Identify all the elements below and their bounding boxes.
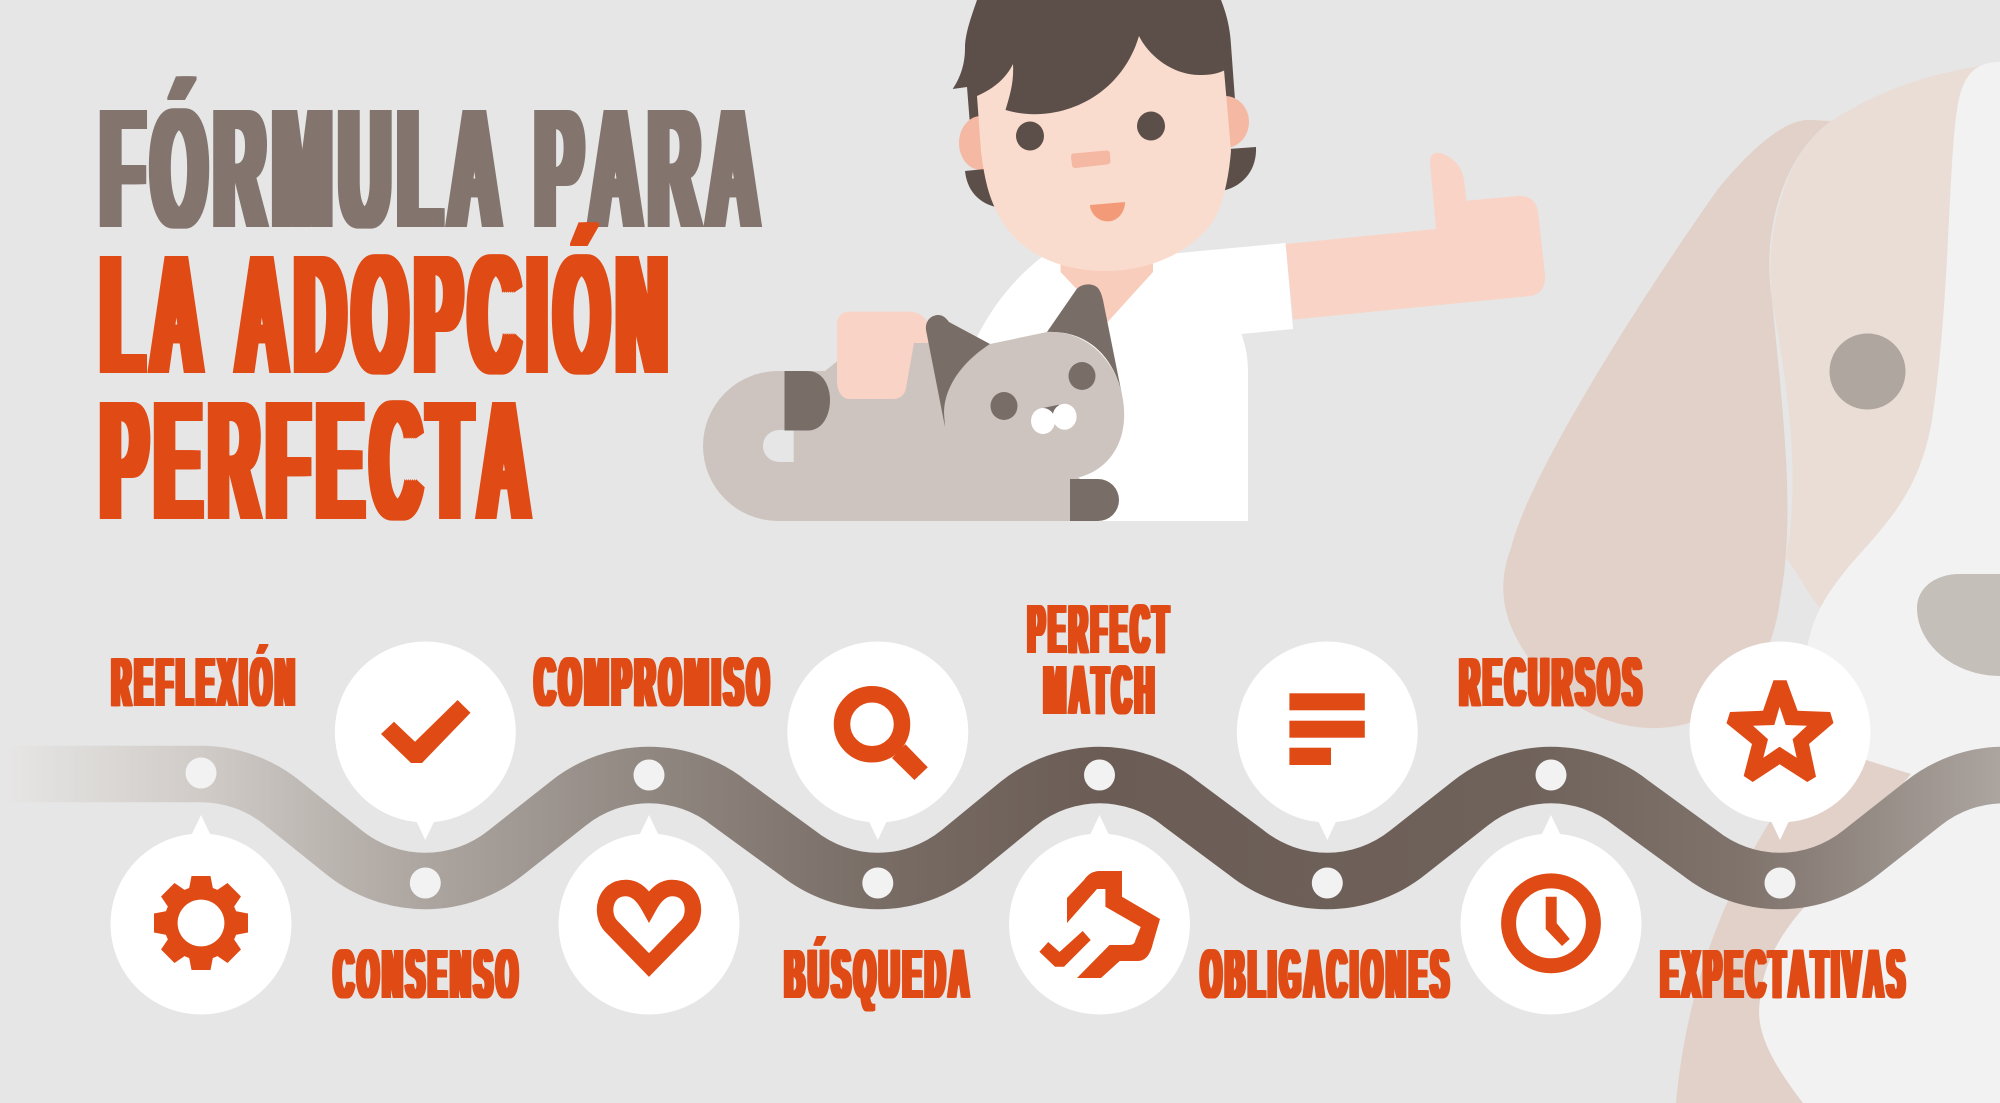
label: perfect match: PERFECT: [1028, 590, 1172, 668]
cat nose: [1043, 405, 1059, 416]
bubble: consenso check: [335, 642, 516, 840]
icon: star: [1726, 680, 1834, 782]
right ear: [1201, 96, 1249, 148]
bubble: búsqueda magnifier: [787, 642, 968, 840]
mouth: [1090, 202, 1125, 221]
label: búsqueda: BÚSQUEDA: [785, 935, 973, 1013]
bubble: perfect match wrench: [1009, 815, 1190, 1014]
icon: list lines: [1289, 693, 1365, 765]
dog front ear: [1771, 63, 2000, 609]
icon: heart: [605, 888, 693, 965]
nose: [1071, 150, 1110, 168]
dog back ear: [1503, 120, 1831, 728]
right sideburn: [1222, 147, 1256, 191]
bubble: expectativas star: [1690, 642, 1870, 840]
cat head: [944, 332, 1124, 479]
left ear: [959, 116, 1003, 170]
cat left eye: [990, 392, 1018, 420]
bubble: compromiso heart: [558, 815, 740, 1014]
icon: gear: [154, 876, 248, 970]
cat top paw: [784, 371, 830, 430]
neck: [1061, 255, 1153, 322]
label: perfect match: [1026, 590, 1172, 729]
label: consenso: CONSENSO: [334, 935, 521, 1013]
cat right ear: [1047, 284, 1122, 395]
dog face: [1700, 62, 2000, 1103]
cat muzzle: [1031, 404, 1077, 434]
label: perfect match: MATCH: [1044, 651, 1158, 729]
white shirt: [964, 243, 1293, 521]
cat illustration: [703, 284, 1124, 521]
left sideburn: [965, 169, 1000, 208]
bubble: reflexión gear: [110, 815, 292, 1014]
bubble: obligaciones list: [1237, 642, 1418, 840]
label: obligaciones: OBLIGACIONES: [1201, 935, 1453, 1013]
icon: check mark: [381, 700, 470, 763]
bubble: recursos clock: [1460, 815, 1642, 1014]
icon: clock: [1509, 881, 1593, 966]
label: expectativas: EXPECTATIVAS: [1661, 935, 1908, 1013]
icon: wrench and check: [1039, 871, 1160, 978]
winding ribbon path: [10, 774, 2000, 881]
face: [977, 20, 1231, 271]
left eye: [1016, 122, 1044, 150]
label: recursos: RECURSOS: [1460, 643, 1645, 721]
title line 2: LA ADOPCIÓN: [101, 220, 675, 410]
cat white belly notch: [763, 430, 794, 462]
title line 3: PERFECTA: [101, 366, 537, 556]
right eye: [1137, 112, 1165, 140]
hand holding cat: [837, 312, 930, 399]
icon: magnifying glass: [842, 694, 928, 780]
cat body: [703, 343, 1080, 521]
cat bottom paw: [1070, 479, 1119, 521]
dog illustration: [1503, 62, 2000, 1103]
dog nose: [1917, 574, 2000, 676]
label: reflexión: REFLEXIÓN: [112, 643, 298, 721]
dog neck swoosh: [1676, 760, 1911, 1103]
person illustration: [953, 0, 1545, 521]
dog eye: [1830, 334, 1906, 410]
path dots: [186, 758, 1796, 898]
cat right eye: [1068, 362, 1096, 390]
title line 1: FÓRMULA PARA: [101, 74, 766, 264]
fringe: [970, 0, 1224, 114]
back hair: [953, 0, 1235, 125]
cat left ear: [926, 315, 990, 427]
label: compromiso: COMPROMISO: [534, 643, 772, 721]
arm with thumb up: [1286, 153, 1545, 320]
